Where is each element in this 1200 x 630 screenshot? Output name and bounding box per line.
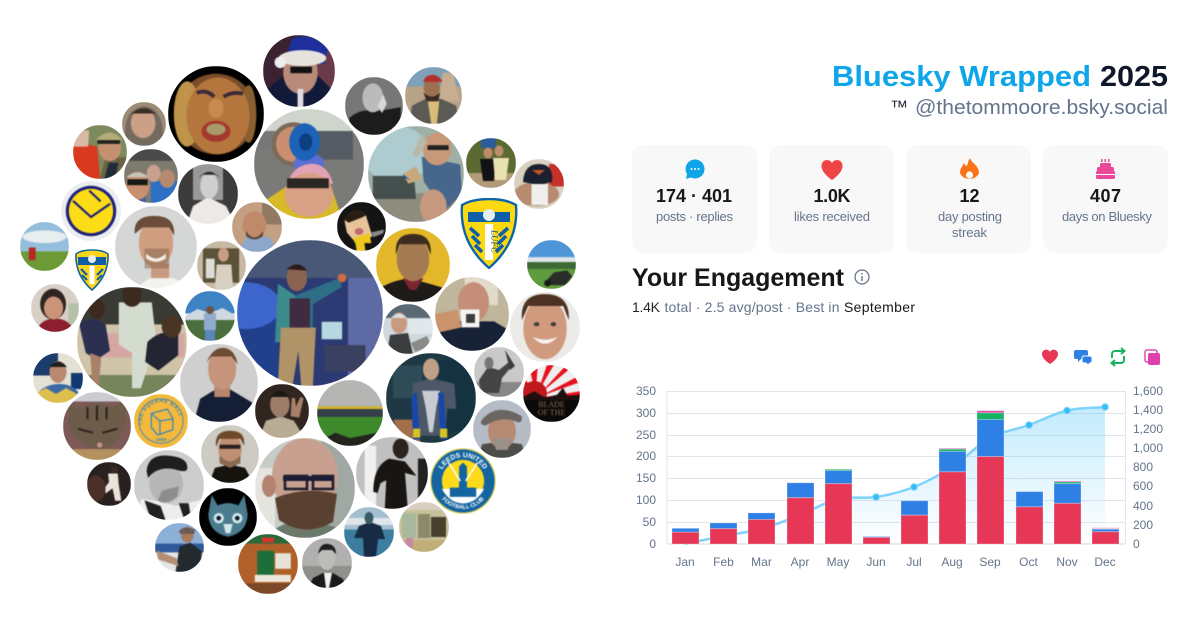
avatar: large Leeds crest [460, 198, 518, 269]
avatar: woman with dark hair [31, 284, 79, 332]
left axis labels: 0 [649, 537, 656, 551]
avatar: man with mug [435, 277, 509, 351]
right axis labels: 800 [1133, 460, 1153, 474]
month labels: Aug [941, 555, 963, 569]
legend icon: quotes [1145, 350, 1160, 365]
avatar: crowd and boy on shoulders [368, 126, 464, 222]
left axis labels: 350 [636, 384, 656, 398]
month labels: Nov [1056, 555, 1078, 569]
left axis labels [636, 384, 656, 551]
cumulative points [873, 404, 1108, 500]
stat card: likes [769, 145, 894, 253]
avatar: black-and-white trophy raiser [474, 347, 524, 397]
month labels: Jan [675, 555, 695, 569]
avatar: man on yellow background [376, 228, 450, 302]
bar: Jan [672, 528, 699, 544]
right axis labels [1133, 384, 1163, 551]
avatar: Leeds United Football Club roundel: LEEDS UNITED [438, 452, 488, 470]
icon: cake [1096, 159, 1115, 179]
avatar: small Leeds badge [75, 249, 109, 291]
legend icon: reposts [1112, 348, 1124, 366]
bar: Apr [787, 483, 814, 544]
stat card: posts and replies [632, 145, 757, 253]
bar: Jul [901, 501, 928, 544]
avatar: peace sign guy [255, 384, 309, 438]
month labels: Sep [979, 555, 1001, 569]
month labels: Dec [1094, 555, 1116, 569]
avatar: group selfie [124, 149, 178, 203]
heading: Your Engagement: Your Engagement [632, 264, 845, 292]
bar: Oct [1016, 492, 1043, 544]
avatar: Leeds United Football Club roundel [430, 448, 496, 514]
avatar: Blade of the Ruck sun: OF THE [538, 408, 565, 417]
left axis labels: 100 [636, 493, 656, 507]
right axis labels: 200 [1133, 518, 1153, 532]
avatar: Leeds United Football Club roundel: FOOTBALL CLUB [442, 496, 484, 510]
avatar: man with blue horn in street [254, 109, 364, 219]
avatar: man in red jacket [73, 125, 127, 179]
avatar: smiling man close up [510, 292, 580, 362]
avatar: bearded man in glasses with curls [201, 425, 259, 483]
stat card: streak: day posting [938, 209, 1002, 224]
avatar: performer on stage, largest circle [237, 240, 383, 386]
stat card: days on Bluesky [1043, 145, 1168, 253]
avatar: lego house [238, 534, 298, 594]
left axis labels: 300 [636, 406, 656, 420]
avatar: The Square Ball badge [134, 394, 188, 448]
right axis labels: 1,200 [1133, 422, 1163, 436]
bar: May [825, 469, 852, 544]
avatar: squirrel illustration [199, 488, 257, 546]
bar: Feb [710, 523, 737, 544]
engagement summary: 1.4K [632, 299, 661, 315]
avatar: man in sweater [33, 353, 83, 403]
avatar: greyscale portrait in suit [302, 538, 352, 588]
avatar: angry woman [168, 66, 264, 162]
avatar: cartoon fan [337, 202, 386, 251]
avatar: man in flat cap [473, 400, 531, 458]
stat card: posts and replies: 174 · 401 [656, 186, 732, 206]
avatar: The Square Ball badge: THE SQUARE BALL [138, 398, 182, 426]
grid lines and axes [667, 391, 1126, 544]
stat card: streak: 12 [960, 186, 980, 206]
chart: monthly engagement [636, 384, 1163, 569]
avatar: The Square Ball badge: · 1989 · [153, 437, 170, 443]
chart legend [1042, 348, 1160, 366]
avatar: landscape with person [20, 222, 69, 271]
avatar: black and white footballer [178, 164, 238, 224]
avatar: large Leeds crest: LUFC [490, 229, 500, 254]
avatar: commentator [383, 304, 433, 354]
avatar: curly haired young man [115, 206, 197, 288]
avatar: man with red cap [405, 67, 462, 124]
month labels: Jun [866, 555, 886, 569]
avatar: black and white suit portrait [345, 77, 403, 135]
avatar: man with shirts display [197, 241, 246, 290]
month labels [675, 555, 1116, 569]
cumulative line [685, 407, 1105, 544]
engagement summary: September [844, 299, 915, 315]
right axis labels: 1,400 [1133, 403, 1163, 417]
avatar: Blade of the Ruck sun [523, 365, 580, 422]
avatar: man with trophy [386, 353, 476, 443]
stat card: posts and replies: posts · replies [656, 209, 734, 224]
avatar: Leeds smiley badge [61, 181, 121, 241]
right axis labels: 1,000 [1133, 441, 1163, 455]
avatar: painted collage [399, 502, 449, 552]
avatar: bald man with glasses and beard [255, 438, 355, 538]
month labels: Feb [713, 555, 734, 569]
avatar: diver on boat [344, 507, 394, 557]
left axis labels: 50 [643, 515, 656, 529]
title: Bluesky Wrapped [832, 61, 1091, 93]
engagement summary [632, 299, 915, 315]
engagement summary: total · 2.5 avg/post · Best in [664, 299, 840, 315]
stat card: days on Bluesky: days on Bluesky [1062, 209, 1152, 224]
right axis labels: 600 [1133, 479, 1153, 493]
month labels: May [827, 555, 849, 569]
stat card: streak: streak [952, 225, 988, 240]
bar: Nov [1054, 481, 1081, 544]
avatar: tabby cat [63, 392, 131, 460]
stat card: days on Bluesky: 407 [1090, 186, 1121, 206]
avatar: man at sea [155, 523, 204, 572]
legend icon: likes [1042, 350, 1058, 364]
avatar: football stadium [317, 380, 383, 446]
avatar: man in dark shirt [180, 344, 258, 422]
bar: Jun [863, 536, 890, 544]
month labels: Jul [906, 555, 922, 569]
bar: Dec [1092, 528, 1119, 544]
right axis labels: 0 [1133, 537, 1140, 551]
stat card: streak [906, 145, 1031, 253]
stat card: likes: likes received [794, 209, 870, 224]
bar: Sep [977, 411, 1004, 544]
right axis labels: 1,600 [1133, 384, 1163, 398]
avatar: person on mountain [185, 291, 235, 341]
avatar: footballer in white on dark [87, 462, 131, 506]
bar: Mar [748, 513, 775, 544]
icon: flame [960, 158, 979, 179]
legend icon: replies [1074, 350, 1092, 365]
handle: ™ [890, 97, 908, 117]
avatar: two men in sports shirts [466, 138, 516, 188]
handle: @thetommoore.bsky.social [915, 97, 1168, 119]
title: 2025 [1100, 61, 1168, 93]
icon: chat bubble [686, 160, 704, 179]
icon: info [855, 270, 869, 284]
left axis labels: 150 [636, 471, 656, 485]
avatar: cap and mug [514, 159, 564, 209]
panel: avatar cloud [20, 35, 580, 594]
avatar: man in grey hood [122, 102, 166, 146]
avatar: man in black cap, greyscale [134, 450, 204, 520]
cumulative area [685, 407, 1105, 544]
avatar: motorbike landscape [527, 240, 576, 289]
icon: heart [821, 160, 843, 180]
left axis labels: 200 [636, 449, 656, 463]
month labels: Mar [751, 555, 772, 569]
month labels: Oct [1019, 555, 1038, 569]
month labels: Apr [791, 555, 809, 569]
bar: Aug [939, 448, 966, 544]
stacked bars [672, 411, 1119, 544]
avatar: vintage football action [77, 287, 187, 397]
avatar: bald smiling man [232, 202, 282, 252]
stat card: likes: 1.0K [814, 186, 850, 206]
right axis labels: 400 [1133, 499, 1153, 513]
avatar: dark silhouette in doorway [356, 437, 428, 509]
avatar: Blade of the Ruck sun: BLADE [538, 400, 565, 409]
left axis labels: 250 [636, 428, 656, 442]
avatar: santa hat man [263, 35, 335, 107]
